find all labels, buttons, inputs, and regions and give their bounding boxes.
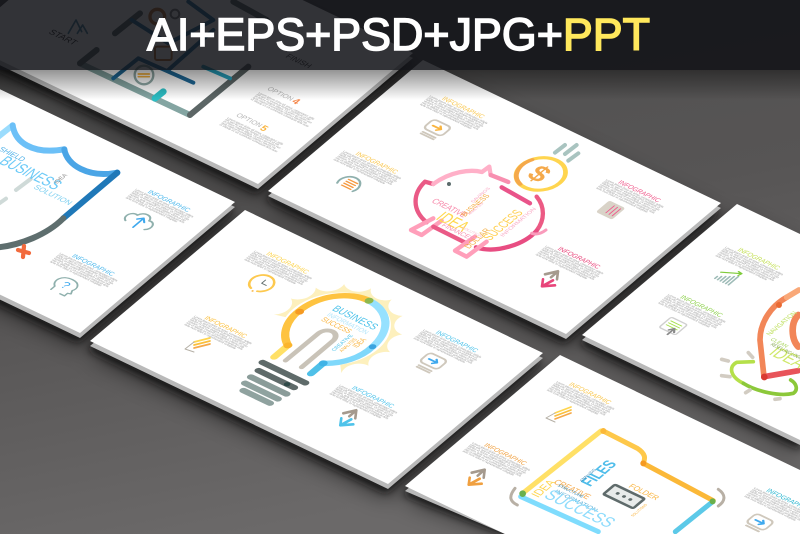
panel: lightbulb slide — [90, 210, 543, 489]
icon: monitor orange arrow — [418, 119, 452, 141]
text block: arrows infographic pink: cing elit, sed do eiusmod tempor incididunt ut — [542, 246, 601, 276]
text block: monitor infographic: Lorem ipsum dolor sit amet, consectetur adipis — [428, 95, 489, 125]
text block: arrows infographic orange: cing elit, sed do eiusmod tempor incididunt ut — [469, 443, 528, 472]
top banner — [0, 0, 800, 70]
text block: arrows infographic pink: Lorem ipsum dolor sit amet, consectetur adipis — [544, 245, 605, 275]
text block: arrows infographic orange: aute irure dolor in reprehenderit voluptate — [461, 449, 516, 477]
text block: head infographic: Lorem ipsum dolor sit amet, consectetur adipis — [58, 252, 119, 282]
bulb outline — [253, 279, 412, 385]
text block: pencil infographic orange: cing elit, sed do eiusmod tempor incididunt ut — [553, 382, 612, 411]
text block: arrows infographic orange — [461, 438, 536, 480]
piggy word cloud: INFORMATION — [499, 207, 538, 238]
text block: head infographic: veniam, quis nostrud exercitation ullamco lab — [53, 257, 111, 286]
text block: document infographic: Lorem ipsum dolor sit amet, consectetur adipis — [667, 293, 727, 324]
icon: document with cursor — [657, 317, 687, 337]
text block: monitor infographic: aute irure dolor in reprehenderit voluptate — [419, 103, 473, 130]
text block: arrows infographic pink: INFOGRAPHIC — [556, 246, 601, 270]
text block: monitor infographic blue: aute irure dolor in reprehenderit voluptate — [413, 337, 467, 364]
text block: monitor infographic blue: nisi ut aliquip ex ea commodo consequat duis — [414, 335, 474, 365]
folder word cloud — [528, 458, 661, 531]
piggy word cloud: DOLLAR — [462, 227, 493, 250]
icon: swap arrows blue — [340, 410, 356, 425]
text block: notebook infographic: cing elit, sed do eiusmod tempor incididunt ut — [603, 180, 661, 209]
option text blocks — [218, 83, 327, 154]
text block: monitor infographic: veniam, quis nostrud exercitation ullamco lab — [423, 99, 481, 129]
icon: speech bubble — [336, 174, 365, 192]
folder word cloud: FILES — [578, 458, 621, 489]
option 4: OPTION — [265, 86, 295, 102]
icon: swap arrows orange — [469, 470, 485, 485]
option 5 — [218, 110, 294, 153]
maze paths — [80, 2, 267, 115]
text block: monitor infographic: labore et dolore magna aliqua. Ut enim ad min — [425, 98, 485, 128]
option 4: Lorem ipsum dolor sit amet, consectetur adip — [257, 91, 316, 121]
text block: cloud infographic: aute irure dolor in reprehenderit voluptate — [125, 196, 179, 223]
text block: clock infographic: cing elit, sed do eiusmod tempor incididunt ut — [251, 251, 310, 281]
text block: cloud infographic: veniam, quis nostrud exercitation ullamco lab — [128, 193, 187, 222]
option 5: Lorem ipsum dolor sit amet, consectetur adip — [226, 116, 285, 146]
folder word cloud: STRUCTURE — [556, 483, 585, 499]
sun rays behind bulb — [253, 267, 431, 380]
text block: head infographic — [49, 249, 123, 290]
text block: arrows infographic blue: aute irure dolor in reprehenderit voluptate — [329, 392, 383, 419]
text block: arrows infographic pink: aute irure dolor in reprehenderit voluptate — [535, 253, 589, 280]
text block: chart infographic: cing elit, sed do eiusmod tempor incididunt ut — [722, 247, 781, 277]
folder word cloud: SOLUTIONS — [629, 503, 649, 517]
piggy word cloud: SUCCESS — [479, 207, 526, 242]
panel: shield slide — [0, 59, 235, 338]
text block: cloud infographic: INFOGRAPHIC — [146, 190, 191, 213]
icon: gears — [68, 9, 179, 84]
icon: growth chart — [714, 266, 742, 285]
bulb word cloud: ANALYSIS — [338, 337, 359, 353]
bulb word cloud: CREATIVE — [331, 334, 355, 352]
text block: arrows infographic orange: nisi ut aliquip ex ea commodo consequat duis — [463, 448, 523, 477]
text block: arrows infographic pink: nisi ut aliquip ex ea commodo consequat duis — [537, 251, 596, 281]
text block: clock infographic: veniam, quis nostrud exercitation ullamco lab — [247, 255, 306, 284]
text block: pencil infographic: veniam, quis nostrud exercitation ullamco lab — [187, 320, 246, 349]
text block: document infographic: nisi ut aliquip ex ea commodo consequat duis — [659, 300, 718, 329]
option 5: ut aliquip ex ea commodo consequat duis aute — [218, 123, 279, 153]
text block: monitor infographic: nisi ut aliquip ex ea commodo consequat duis — [421, 101, 480, 131]
folder word cloud: INFORMATION — [552, 489, 598, 513]
text block: head infographic: labore et dolore magna aliqua. Ut enim ad min — [55, 255, 115, 285]
text block: clock infographic — [243, 247, 317, 288]
piggy word cloud: FINANCES — [439, 223, 476, 242]
icon: dollar coin: $ — [521, 160, 559, 187]
text block: speech infographic: cing elit, sed do eiusmod tempor incididunt ut — [340, 151, 399, 181]
bulb word cloud: INFORMATION — [325, 312, 370, 336]
text block: speech infographic: Lorem ipsum dolor sit amet, consectetur adipis — [342, 150, 403, 180]
text block: cloud infographic: nisi ut aliquip ex ea commodo consequat duis — [127, 194, 186, 224]
text block: head infographic: INFOGRAPHIC — [70, 254, 116, 277]
shield word cloud: SOLUTION — [31, 183, 75, 207]
icon: head with question mark: ? — [57, 279, 74, 291]
text block: notebook infographic: nisi ut aliquip ex ea commodo consequat duis — [597, 185, 656, 214]
text block: document infographic: cing elit, sed do eiusmod tempor incididunt ut — [665, 295, 723, 324]
text block: document infographic — [657, 290, 731, 332]
text block: arrows infographic blue: Lorem ipsum dolor sit amet, consectetur adipis — [338, 384, 399, 414]
icon: dollar coin — [506, 151, 576, 196]
text block: cloud infographic: cing elit, sed do eiusmod tempor incididunt ut — [132, 190, 191, 219]
text block: head infographic: cing elit, sed do eiusmod tempor incididunt ut — [56, 254, 115, 283]
piggy word cloud: SAVINGS — [469, 186, 491, 203]
option 4: 4 — [289, 97, 303, 107]
icon: monitor blue arrow — [414, 352, 448, 374]
text block: speech infographic: labore et dolore magna aliqua. Ut enim ad min — [338, 153, 398, 183]
text block: arrows infographic blue — [329, 381, 403, 422]
icon: pencil orange — [546, 407, 571, 422]
text block: arrows infographic pink — [535, 242, 609, 283]
panel: piggy bank slide — [268, 60, 721, 339]
text block: head infographic: nisi ut aliquip ex ea commodo consequat duis — [51, 258, 110, 288]
text block: pencil infographic orange — [546, 377, 620, 419]
text block: pencil infographic orange: labore et dolore magna aliqua. Ut enim ad min — [551, 384, 612, 414]
text block: cloud infographic — [125, 185, 199, 226]
text block: arrows infographic blue: labore et dolore magna aliqua. Ut enim ad min — [334, 387, 395, 417]
option 5: OPTION — [234, 113, 263, 129]
text block: arrows infographic blue: veniam, quis nostrud exercitation ullamco lab — [332, 389, 391, 418]
icon: swap arrows pink — [542, 271, 558, 286]
finish label: FINISH — [283, 52, 314, 70]
option 5: 5 — [257, 124, 271, 134]
text block: document infographic: aute irure dolor in reprehenderit voluptate — [657, 301, 711, 328]
option 5: elit sed do eiusmod tempor incididunt ut lab — [224, 118, 281, 146]
text block: arrows infographic orange: veniam, quis nostrud exercitation ullamco lab — [465, 446, 524, 476]
text block: monitor infographic blue: cing elit, sed do eiusmod tempor incididunt ut — [420, 330, 479, 359]
text block: chart infographic: labore et dolore magna aliqua. Ut enim ad min — [720, 249, 780, 279]
option 5: et dolore magna aliqua. Ut enim ad minim ven — [222, 120, 282, 150]
text block: pencil infographic: Lorem ipsum dolor sit amet, consectetur adipis — [193, 315, 254, 345]
folder word cloud: IDEA — [528, 478, 559, 499]
text block: pencil infographic orange: Lorem ipsum dolor sit amet, consectetur adipis — [555, 380, 616, 411]
text block: pencil infographic orange: aute irure dolor in reprehenderit voluptate — [546, 388, 600, 416]
folder word cloud: FOLDER — [626, 482, 661, 502]
piggy word cloud: BUSINESS — [459, 193, 492, 218]
text block: chart infographic: nisi ut aliquip ex ea commodo consequat duis — [716, 252, 776, 282]
icon: pencil yellow — [185, 338, 210, 352]
option 4: et dolore magna aliqua. Ut enim ad minim ven — [253, 94, 313, 124]
text block: speech infographic: nisi ut aliquip ex ea commodo consequat duis — [334, 156, 394, 186]
pin word cloud: CLEAN — [768, 337, 789, 349]
text block: notebook infographic: aute irure dolor in reprehenderit voluptate — [595, 186, 649, 213]
piggy word cloud: CREATIVE — [429, 197, 470, 219]
text block: clock infographic: aute irure dolor in reprehenderit voluptate — [243, 258, 298, 285]
icon: orange cross — [18, 246, 29, 257]
piggy word cloud: ANALYSIS — [466, 202, 485, 215]
text block: monitor infographic blue: veniam, quis nostrud exercitation ullamco lab — [416, 333, 475, 363]
text block: pencil infographic: labore et dolore magna aliqua. Ut enim ad min — [189, 318, 249, 348]
text block: notebook infographic: Lorem ipsum dolor sit amet, consectetur adipis — [605, 178, 665, 209]
text block: pencil infographic orange: veniam, quis nostrud exercitation ullamco lab — [549, 385, 608, 414]
title: AI+EPS+PSD+JPG+PPT — [147, 9, 650, 60]
text block: arrows infographic orange: labore et dolore magna aliqua. Ut enim ad min — [467, 445, 527, 475]
text block: chart infographic — [714, 243, 789, 284]
filament — [286, 328, 340, 368]
icon: cloud with arrow — [120, 209, 159, 233]
text block: monitor infographic blue: INFOGRAPHIC — [433, 330, 479, 354]
text block: cloud infographic: labore et dolore magna aliqua. Ut enim ad min — [130, 191, 191, 221]
panel: location pin slide — [582, 204, 800, 445]
text block: speech infographic: INFOGRAPHIC — [353, 151, 399, 175]
shield outline — [0, 125, 117, 247]
text block: notebook infographic: INFOGRAPHIC — [616, 180, 662, 204]
option 4 — [250, 84, 327, 128]
text block: pencil infographic: nisi ut aliquip ex ea commodo consequat duis — [185, 321, 245, 351]
text block: clock infographic: Lorem ipsum dolor sit amet, consectetur adipis — [253, 250, 314, 280]
start label: START — [46, 28, 80, 47]
shield word cloud: IDEA — [53, 173, 69, 185]
text block: pencil infographic: cing elit, sed do eiusmod tempor incididunt ut — [191, 316, 250, 346]
text block: document infographic: INFOGRAPHIC — [678, 295, 724, 319]
pin word cloud — [765, 311, 800, 371]
text block: head infographic: aute irure dolor in reprehenderit voluptate — [49, 260, 103, 287]
icon: monitor teal arrow — [743, 513, 774, 533]
text block: clock infographic: nisi ut aliquip ex ea commodo consequat duis — [245, 256, 305, 286]
text block: arrows infographic pink: veniam, quis nostrud exercitation ullamco lab — [538, 250, 597, 279]
text block: chart infographic: Lorem ipsum dolor sit amet, consectetur adipis — [724, 246, 785, 276]
text block: monitor infographic — [419, 91, 493, 133]
piggy word cloud: SOLUTION — [460, 225, 484, 238]
icon: folder card — [603, 485, 645, 508]
text block: notebook infographic: veniam, quis nostrud exercitation ullamco lab — [599, 183, 658, 212]
white inner disc — [258, 279, 414, 379]
text block: monitor infographic blue: labore et dolore magna aliqua. Ut enim ad min — [418, 332, 479, 362]
bulb base bars — [234, 362, 306, 407]
piggy word cloud — [429, 186, 538, 250]
text block: monitor infographic: INFOGRAPHIC — [440, 96, 486, 120]
option 4: elit sed do eiusmod tempor incididunt ut lab — [255, 93, 312, 121]
bulb word cloud: IDEA — [350, 336, 369, 349]
text block: arrows infographic orange: INFOGRAPHIC — [482, 443, 528, 467]
text block: speech infographic — [332, 147, 407, 188]
bulb word cloud: SUCCESS — [319, 316, 354, 335]
text block: cloud infographic: Lorem ipsum dolor sit amet, consectetur adipis — [134, 188, 195, 218]
text block: monitor infographic: cing elit, sed do eiusmod tempor incididunt ut — [426, 96, 485, 126]
text block: pencil infographic — [183, 312, 257, 353]
panel: start to finish maze slide — [0, 0, 413, 189]
panel: folder slide — [405, 355, 800, 534]
option 5: quis nostrud exercitation ullamco laboris nis — [220, 121, 278, 150]
text block: speech infographic: aute irure dolor in reprehenderit voluptate — [332, 158, 387, 185]
icon: notebook — [596, 200, 626, 220]
text block: notebook infographic: labore et dolore magna aliqua. Ut enim ad min — [601, 182, 661, 212]
text block: pencil infographic orange: INFOGRAPHIC — [567, 382, 612, 406]
piggy word cloud: IDEA — [432, 209, 474, 235]
text block: pencil infographic: aute irure dolor in reprehenderit voluptate — [183, 323, 237, 350]
text block: document infographic: veniam, quis nostrud exercitation ullamco lab — [661, 298, 720, 327]
text block: arrows infographic pink: labore et dolore magna aliqua. Ut enim ad min — [540, 248, 601, 278]
folder word cloud: CREATIVE — [551, 478, 593, 501]
piggy bank outline — [411, 145, 578, 257]
text block: clock infographic: labore et dolore magna aliqua. Ut enim ad min — [249, 253, 309, 283]
bulb word cloud — [301, 304, 385, 358]
option 4: ut aliquip ex ea commodo consequat duis aute — [250, 98, 310, 128]
text block: arrows infographic blue: nisi ut aliquip ex ea commodo consequat duis — [330, 390, 390, 420]
bulb word cloud: BUSINESS — [329, 304, 381, 332]
text block: clock infographic: INFOGRAPHIC — [264, 251, 310, 275]
shadow below the top banner — [0, 70, 800, 100]
text block: arrows infographic blue: INFOGRAPHIC — [349, 386, 395, 409]
text block: pencil infographic orange: nisi ut aliquip ex ea commodo consequat duis — [548, 387, 607, 416]
folder outline — [511, 428, 724, 532]
text block: pencil infographic: INFOGRAPHIC — [202, 315, 248, 339]
icon: head with question mark — [48, 275, 82, 297]
text block: arrows infographic blue: cing elit, sed do eiusmod tempor incididunt ut — [336, 386, 395, 415]
text block: monitor infographic teal: aute irure dolor in reprehenderit voluptate — [743, 495, 798, 522]
icon: clock — [242, 272, 279, 296]
option 4: quis nostrud exercitation ullamco laboris nis — [252, 96, 309, 125]
text block: monitor infographic teal — [743, 483, 800, 525]
text block: notebook infographic — [595, 175, 669, 217]
text block: chart infographic: aute irure dolor in reprehenderit voluptate — [714, 254, 769, 281]
text block: chart infographic: veniam, quis nostrud exercitation ullamco lab — [718, 251, 777, 280]
text block: speech infographic: veniam, quis nostrud exercitation ullamco lab — [336, 155, 395, 184]
text block: arrows infographic orange: Lorem ipsum dolor sit amet, consectetur adipis — [471, 441, 532, 472]
text block: document infographic: labore et dolore magna aliqua. Ut enim ad min — [663, 296, 723, 326]
text block: chart infographic: INFOGRAPHIC — [735, 247, 781, 271]
text block: monitor infographic blue — [413, 325, 487, 367]
pin outline and ring — [722, 290, 799, 399]
folder word cloud: ANALYSIS — [578, 468, 597, 482]
text block: monitor infographic blue: Lorem ipsum dolor sit amet, consectetur adipis — [422, 329, 483, 359]
